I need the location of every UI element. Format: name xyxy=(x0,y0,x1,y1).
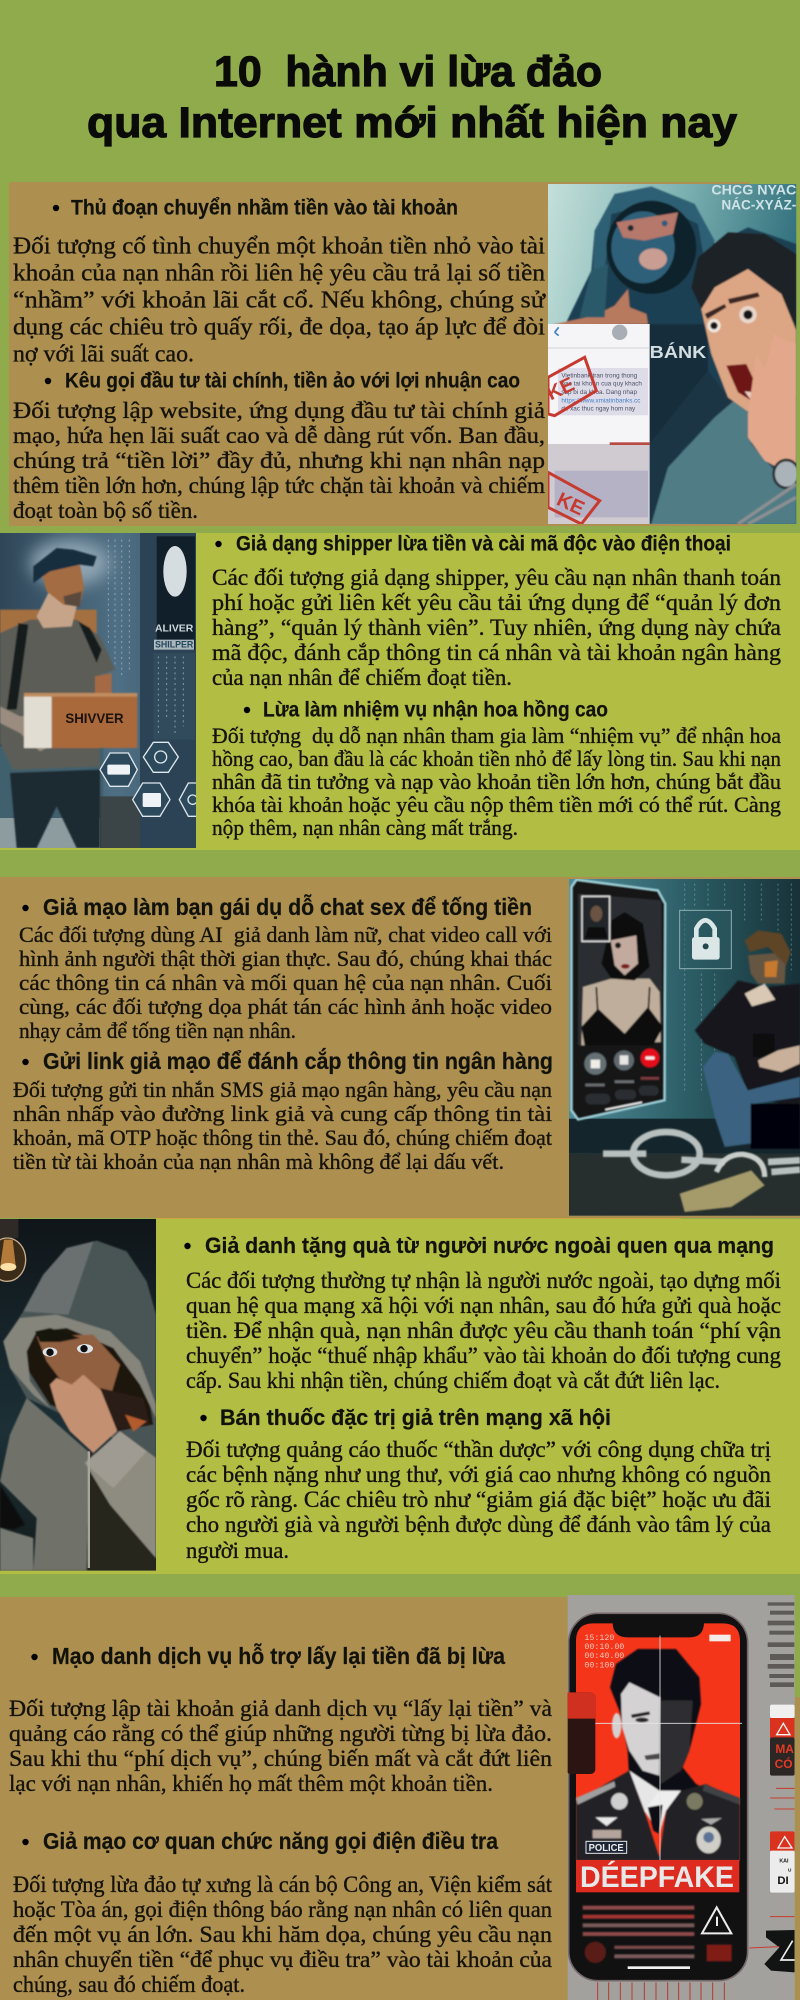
text block: lấy lại tiền: quảng cáo rằng có thể giúp những người từng bị lừa đảo. xyxy=(9,1721,552,1746)
text block: chuyển nhầm tiền: Đối tượng cố tình chuyển một khoản tiền nhỏ vào tài xyxy=(13,234,545,260)
illustration: deepfake police phone xyxy=(566,1594,799,2000)
illustration: hooded person with light bulb xyxy=(0,1218,156,1571)
text block: bạn gái: cùng, các đối tượng dọa phát tán các hình ảnh hoặc video xyxy=(19,994,552,1019)
text block: thuốc giả: Đối tượng quảng cáo thuốc “thần dược” với công dụng chữa trị xyxy=(186,1437,771,1462)
text block: shipper: Các đối tượng giả dạng shipper, yêu cầu nạn nhân thanh toán xyxy=(212,565,781,590)
panel: section 2 xyxy=(0,532,800,850)
illustration: fake shipper with parcel xyxy=(0,533,197,848)
heading: lấy lại tiền: Mạo danh dịch vụ hỗ trợ lấy lại tiền đã bị lừa xyxy=(52,1642,505,1669)
illustration: hacker and shocked victim: CHCG NYAC xyxy=(711,182,796,198)
heading: nhiệm vụ: Lừa làm nhiệm vụ nhận hoa hồng cao xyxy=(263,698,608,722)
heading: cơ quan chức năng: Giả mạo cơ quan chức năng gọi điện điều tra xyxy=(43,1828,498,1854)
text block: cơ quan chức năng: hoặc Tòa án, gọi điện thông báo rằng nạn nhân có liên quan xyxy=(13,1897,552,1922)
fake SMS phone card: bao tai khoan cua quy khach xyxy=(561,381,642,388)
text block: thuốc giả xyxy=(186,1437,772,1563)
panel background 4 xyxy=(0,1219,800,1574)
text block: quà tặng: quan hệ qua mạng xã hội với nạn nhân, sau đó hứa gửi quà hoặc xyxy=(186,1293,781,1318)
text block: nhiệm vụ: nhân đã tin tưởng và nạp vào khoản tiền lớn hơn, chúng bắt đầu xyxy=(212,769,781,794)
text block: quà tặng xyxy=(186,1268,782,1393)
text block: bạn gái: Các đối tượng dùng AI giả danh làm nữ, chat video call với xyxy=(19,922,552,947)
panel background 3 xyxy=(0,877,800,1218)
text block: nhiệm vụ xyxy=(212,723,781,840)
text block: shipper: hàng”, “quản lý thành viên”. Tuy nhiên, ứng dụng này chứa xyxy=(212,615,781,640)
heading: đầu tư tài chính: Kêu gọi đầu tư tài chính, tiền ảo với lợi nhuận cao xyxy=(65,370,520,392)
illustration: deepfake police phone: 00:100 xyxy=(584,1660,614,1670)
text block: chuyển nhầm tiền xyxy=(13,234,546,368)
fake SMS phone card: KE xyxy=(553,489,588,520)
illustration: deepfake police phone: POLICE xyxy=(589,1843,624,1854)
text block: chuyển nhầm tiền: nợ với lãi suất cao. xyxy=(13,342,194,368)
text block: đầu tư tài chính xyxy=(13,398,545,523)
illustration: hacker and shocked victim: NÁC-XYÁZ- xyxy=(721,196,797,212)
panel: section 3 xyxy=(0,877,800,1218)
heading: bạn gái: Giả mạo làm bạn gái dụ dỗ chat sex để tống tiền xyxy=(43,893,532,920)
text block: thuốc giả: các bệnh nặng như ung thư, với giá cao nhưng không có nguồn xyxy=(186,1462,772,1487)
text block: thuốc giả: gốc rõ ràng. Các chiêu trò như “giảm giá đặc biệt” hoặc ưu đãi xyxy=(186,1487,771,1512)
fake SMS phone card: sap bi da khoa. Dang nhap xyxy=(561,389,637,396)
text block: đầu tư tài chính: Đối tượng lập website, ứng dụng đầu tư tài chính giả xyxy=(13,398,545,423)
text block: đầu tư tài chính: chúng trả “tiền lời” đầy đủ, nhưng khi nạn nhân nạp xyxy=(13,448,545,473)
fake SMS phone card: KE xyxy=(543,374,578,405)
side warning cards: MA xyxy=(775,1742,794,1756)
text block: lấy lại tiền xyxy=(9,1696,553,1796)
padlock xyxy=(680,1154,765,1212)
text block: chuyển nhầm tiền: dụng các chiêu trò quấy rối, đe dọa, tạo áp lực để đòi xyxy=(13,314,545,340)
fake SMS phone card xyxy=(543,324,650,524)
fake SMS phone card: Vietinbank tran trong thong xyxy=(561,372,638,379)
text block: bạn gái: hình ảnh người thật thời gian thực. Sau đó, chúng khai thác xyxy=(19,946,552,971)
heading: thuốc giả: Bán thuốc đặc trị giả trên mạng xã hội xyxy=(220,1405,611,1430)
phone body xyxy=(569,1613,748,1981)
text block: link giả mạo: Đối tượng gửi tin nhắn SMS giả mạo ngân hàng, yêu cầu nạn xyxy=(13,1077,552,1102)
text block: chuyển nhầm tiền: “nhầm” với khoản lãi cắt cổ. Nếu không, chúng sử xyxy=(13,288,546,314)
left red tab xyxy=(566,1692,595,1774)
text block: cơ quan chức năng xyxy=(13,1872,553,1997)
text block: thuốc giả: cho người già và người bệnh được dùng để đánh vào tâm lý của xyxy=(186,1512,771,1537)
text block: đầu tư tài chính: thêm tiền lớn hơn, chúng lập tức chặn tài khoản và chiếm xyxy=(13,473,545,498)
blurred alert lines xyxy=(583,1906,732,1963)
text block: lấy lại tiền: Đối tượng lập tài khoản giả danh dịch vụ “lấy lại tiền” và xyxy=(9,1696,552,1721)
illustration: deepfake police phone: 15:120 xyxy=(584,1633,614,1643)
illustration: fake shipper with parcel: ALIVER xyxy=(155,624,193,635)
panel: section 4 xyxy=(0,1218,800,1574)
deepfake banner: DÉEPFAKE xyxy=(580,1860,734,1894)
text block: cơ quan chức năng: chúng, sau đó chiếm đoạt. xyxy=(13,1972,245,1997)
illustration: fake shipper with parcel: SHIVVER xyxy=(65,710,124,726)
text block: shipper: của nạn nhân để chiếm đoạt tiền. xyxy=(212,665,512,690)
panel: section 5 xyxy=(0,1594,800,2000)
text block: lấy lại tiền: lạc với nạn nhân, khiến họ mất thêm một khoản tiền. xyxy=(9,1771,493,1796)
text block: bạn gái xyxy=(19,922,552,1043)
light bulb xyxy=(0,1219,26,1281)
illustration: hacker and shocked victim: BÁNK xyxy=(650,341,706,362)
heading: quà tặng: Giả danh tặng quà từ người nước ngoài quen qua mạng xyxy=(205,1233,774,1258)
side warning cards xyxy=(749,1705,795,1972)
text block: link giả mạo: nhân nhấp vào đường link giả và cung cấp thông tin tài xyxy=(13,1101,552,1126)
text block: thuốc giả: người mua. xyxy=(186,1538,289,1563)
panel: section 1 xyxy=(9,182,799,526)
panel background 2 xyxy=(0,533,800,850)
illustration: fake shipper with parcel: SHILPER xyxy=(155,639,194,649)
illustration: video call phone and chained man xyxy=(568,877,800,1217)
text block: quà tặng: cấp. Sau khi nhận tiền, chúng chiếm đoạt và cắt đứt liên lạc. xyxy=(186,1368,720,1393)
text block: shipper: mã độc, đánh cắp thông tin cá nhân và tài khoản ngân hàng xyxy=(212,640,782,665)
fake SMS phone card: https://www.xmiatinbanks.cc xyxy=(561,397,640,404)
hexagon icons xyxy=(100,742,197,816)
illustration: deepfake police phone: 00:40.00 xyxy=(584,1651,624,1661)
text block: cơ quan chức năng: đến một vụ án lớn. Sau khi hăm dọa, chúng yêu cầu nạn xyxy=(13,1922,553,1947)
glowing lock icon xyxy=(680,910,731,969)
title: qua Internet mới nhất hiện nay xyxy=(87,99,737,147)
title: 10 hành vi lừa đảo xyxy=(214,48,602,96)
text block: quà tặng: Các đối tượng thường tự nhận là người nước ngoài, tạo dựng mối xyxy=(186,1268,781,1293)
illustration: hacker and shocked victim xyxy=(543,182,799,524)
text block: nhiệm vụ: Đối tượng dụ dỗ nạn nhân tham gia làm “nhiệm vụ” để nhận hoa xyxy=(212,723,781,748)
panel background 1 xyxy=(9,182,749,526)
side warning cards: CÓ xyxy=(775,1756,793,1771)
text block: quà tặng: tiền. Để nhận quà, nạn nhân được yêu cầu thanh toán “phí vận xyxy=(186,1318,782,1343)
illustration: deepfake police phone: 00:10.00 xyxy=(584,1642,624,1652)
side warning cards: U xyxy=(788,1867,792,1872)
broken chain xyxy=(603,1132,800,1175)
text block: shipper xyxy=(212,565,782,690)
text block: chuyển nhầm tiền: khoản của nạn nhân rồi liên hệ yêu cầu trả lại số tiền xyxy=(13,260,545,286)
text block: link giả mạo: tiền từ tài khoản của nạn nhân mà không để lại dấu vết. xyxy=(13,1149,504,1174)
text block: bạn gái: các thông tin cá nhân và mối quan hệ của nạn nhân. Cuối xyxy=(19,970,552,995)
text block: link giả mạo xyxy=(13,1077,553,1174)
text block: nhiệm vụ: khóa tài khoản hoặc yêu cầu nộp thêm tiền mới có thể rút. Càng xyxy=(212,792,781,817)
text block: đầu tư tài chính: mạo, hứa hẹn lãi suất cao và dễ dàng rút vốn. Ban đầu, xyxy=(13,423,545,448)
heading: chuyển nhầm tiền: Thủ đoạn chuyển nhầm tiền vào tài khoản xyxy=(71,196,458,220)
text block: quà tặng: chuyển” hoặc “thuế nhập khẩu” vào tài khoản do đối tượng cung xyxy=(186,1343,781,1368)
text block: lấy lại tiền: Sau khi thu “phí dịch vụ”, chúng biến mất và cắt đứt liên xyxy=(9,1746,553,1771)
panel background 5 xyxy=(0,1597,568,2000)
text block: shipper: phí hoặc gửi liên kết yêu cầu tải ứng dụng để “quản lý đơn xyxy=(212,590,782,615)
text block: đầu tư tài chính: đoạt toàn bộ số tiền. xyxy=(13,498,198,523)
heading: link giả mạo: Gửi link giả mạo để đánh cắp thông tin ngân hàng xyxy=(43,1047,553,1074)
text block: cơ quan chức năng: nhân chuyển tiền “để phục vụ điều tra” vào tài khoản của xyxy=(13,1947,552,1972)
fake SMS phone card: de xac thuc ngay hom nay xyxy=(561,406,636,413)
text block: nhiệm vụ: nộp thêm, nạn nhân càng mất trắng. xyxy=(212,815,518,840)
right edge strip xyxy=(795,1697,800,2000)
side warning cards: DI xyxy=(777,1875,789,1887)
heading: shipper: Giả dạng shipper lừa tiền và cài mã độc vào điện thoại xyxy=(236,532,731,556)
side warning cards: KAI xyxy=(779,1859,789,1865)
text block: cơ quan chức năng: Đối tượng lừa đảo tự xưng là cán bộ Công an, Viện kiểm sát xyxy=(13,1872,553,1897)
text block: nhiệm vụ: hồng cao, ban đầu là các khoản tiền nhỏ để lấy lòng tin. Sau khi nạn xyxy=(212,746,781,771)
text block: bạn gái: nhạy cảm để tống tiền nạn nhân. xyxy=(19,1018,296,1043)
title xyxy=(87,48,737,147)
decorative band xyxy=(156,1218,681,1222)
text block: link giả mạo: khoản, mã OTP hoặc thông tin thẻ. Sau đó, chúng chiếm đoạt xyxy=(13,1125,553,1150)
